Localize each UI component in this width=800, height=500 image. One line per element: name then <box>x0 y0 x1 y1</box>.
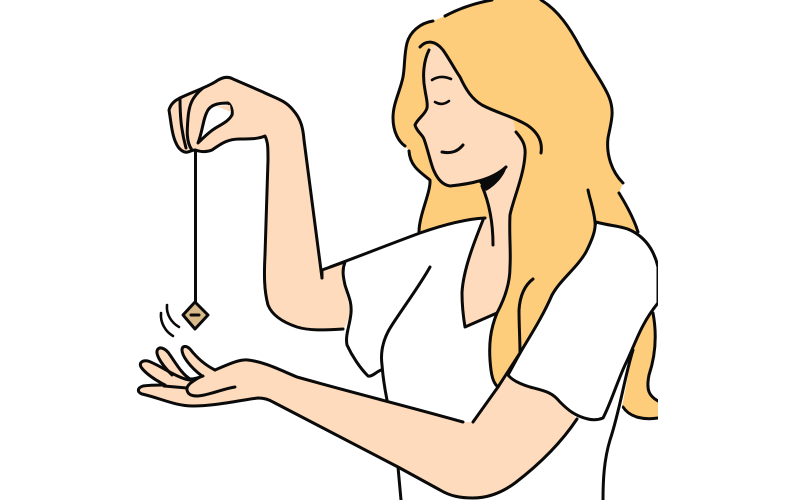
lower arm and open hand <box>138 346 577 498</box>
illustration: woman with pendulum <box>136 0 658 500</box>
hair <box>393 0 658 419</box>
raised arm and hand <box>169 77 350 330</box>
finger gap <box>198 103 232 143</box>
hair front lock <box>473 132 595 422</box>
pendulum weight <box>183 302 208 329</box>
thumb <box>164 377 235 396</box>
hairline <box>420 42 541 153</box>
smile <box>442 145 463 153</box>
arm edges <box>215 360 463 422</box>
closed eye <box>435 101 449 104</box>
right sleeve <box>508 222 658 420</box>
motion lines <box>161 305 179 336</box>
shirt <box>330 218 633 500</box>
figure <box>138 0 658 500</box>
finger lines <box>180 98 186 148</box>
eyebrow <box>432 77 451 80</box>
neck right line <box>510 132 525 267</box>
pendulum string <box>194 150 197 302</box>
jaw shadow <box>479 168 506 191</box>
face <box>415 42 541 245</box>
fingers <box>182 346 215 376</box>
face profile <box>415 50 506 186</box>
neck and chest <box>463 155 525 327</box>
inner neck line <box>482 186 493 245</box>
